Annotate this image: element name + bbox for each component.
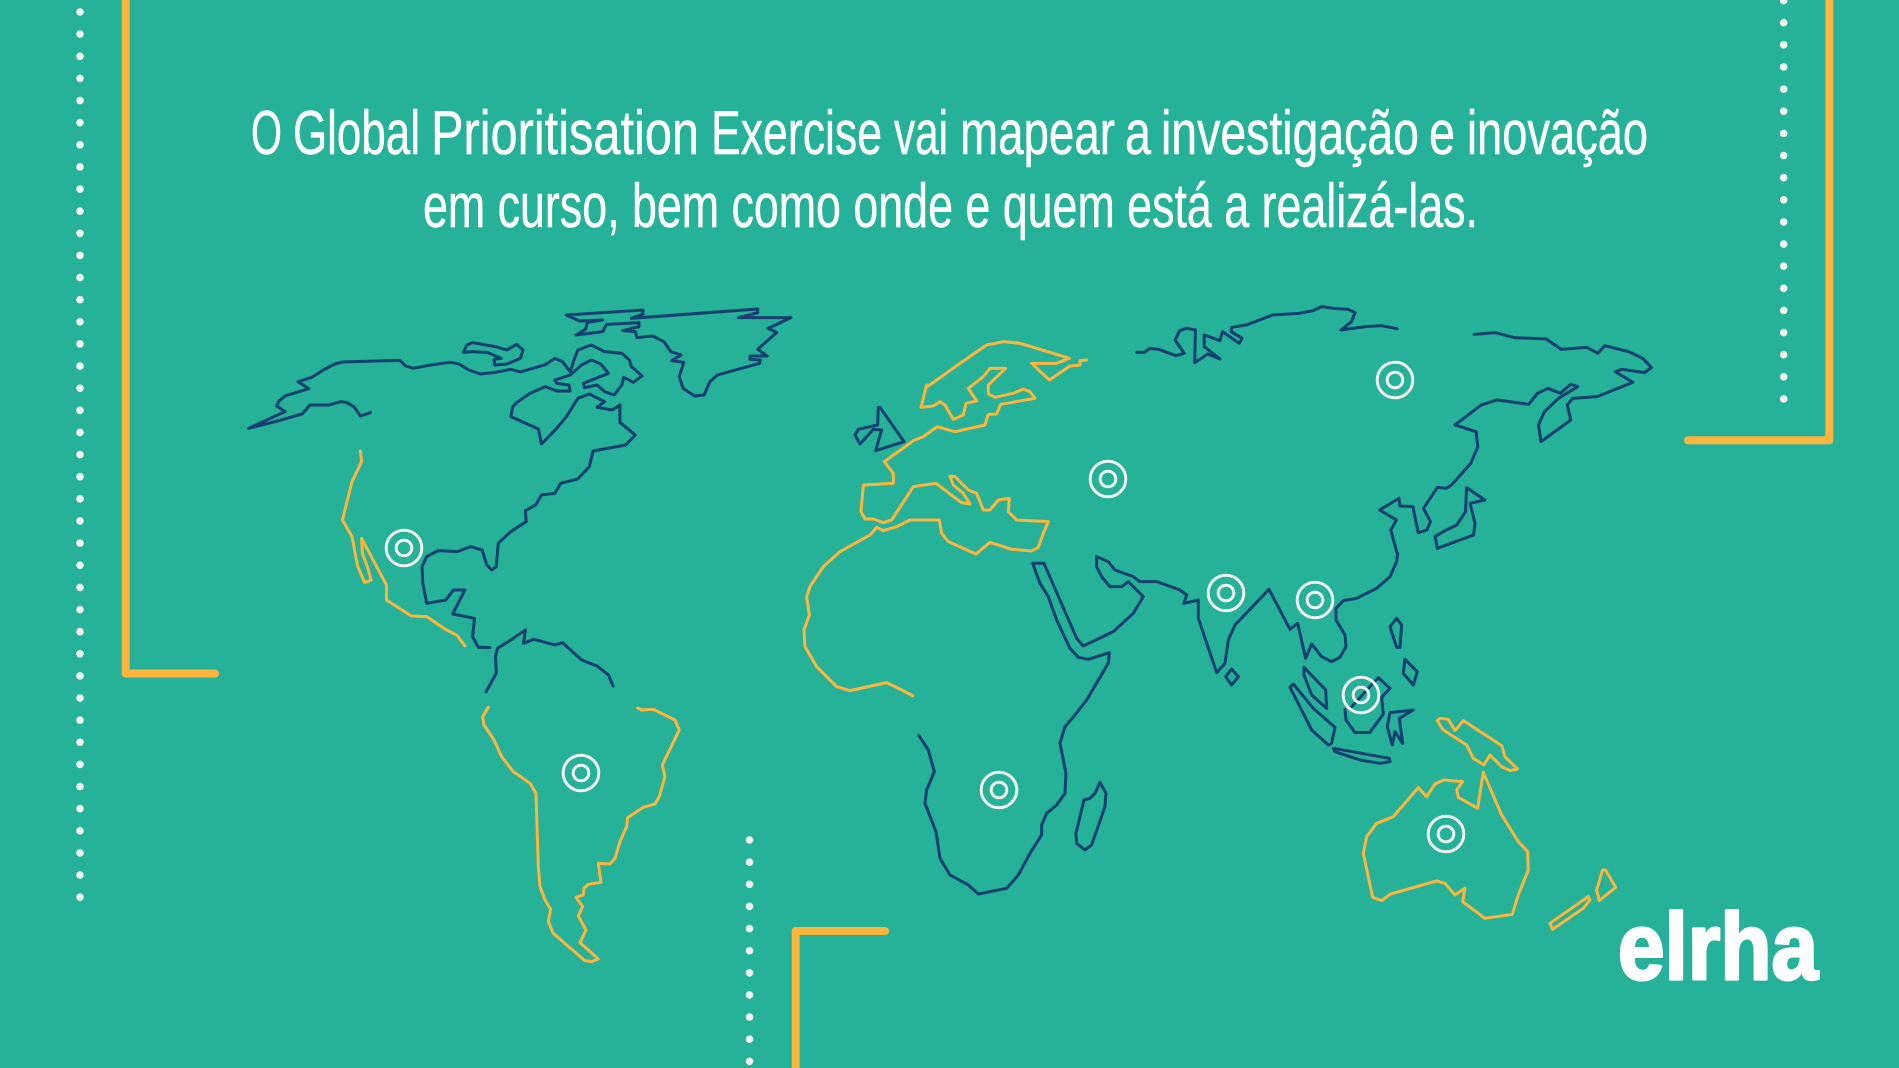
marker: Borneo (1343, 677, 1379, 713)
title: Exercise (711, 99, 882, 168)
marker: Central Asia (1090, 461, 1126, 497)
dotted line: bottom centre (746, 840, 753, 1068)
title (251, 99, 1648, 241)
marker: South America (563, 755, 599, 791)
title: inovação (1467, 99, 1648, 168)
map: Southern Africa and Madagascar (919, 700, 1106, 894)
map: South America (483, 707, 679, 962)
marker: South-East Asia mainland (1297, 582, 1333, 618)
title: investigação (1161, 99, 1419, 168)
map: North America (249, 309, 791, 692)
title: O (251, 99, 282, 168)
map: Russia, East Asia and Japan (1137, 307, 1651, 553)
title: e (1429, 99, 1455, 168)
bracket: top left (126, 0, 215, 674)
location markers (386, 362, 1464, 852)
title: mapear (960, 99, 1115, 168)
title: Global (293, 99, 420, 168)
title: Prioritisation (431, 99, 699, 168)
map: Australia, Papua New Guinea and New Zealand (1363, 718, 1616, 929)
map: South and South-East Asia (1180, 553, 1417, 763)
dotted line: left (76, 12, 84, 898)
marker: Southern Africa (981, 772, 1017, 808)
bracket: bottom centre (796, 931, 885, 1068)
marker: Australia (1428, 816, 1464, 852)
marker: India (1208, 575, 1244, 611)
marker: Siberia (1377, 362, 1413, 398)
map: Europe and North Africa (804, 342, 1087, 696)
marker: Central America (386, 530, 422, 566)
logo: elrha: elrha (1618, 894, 1819, 1000)
world map (249, 307, 1651, 962)
map: UK, Arabia and East Africa coast (855, 407, 1180, 700)
title: a (1125, 99, 1151, 168)
title: em curso, bem como onde e quem está a realizá-las. (423, 172, 1478, 241)
bracket: top right (1688, 0, 1829, 440)
title: vai (894, 99, 948, 168)
dotted line: right (1780, 1, 1787, 400)
